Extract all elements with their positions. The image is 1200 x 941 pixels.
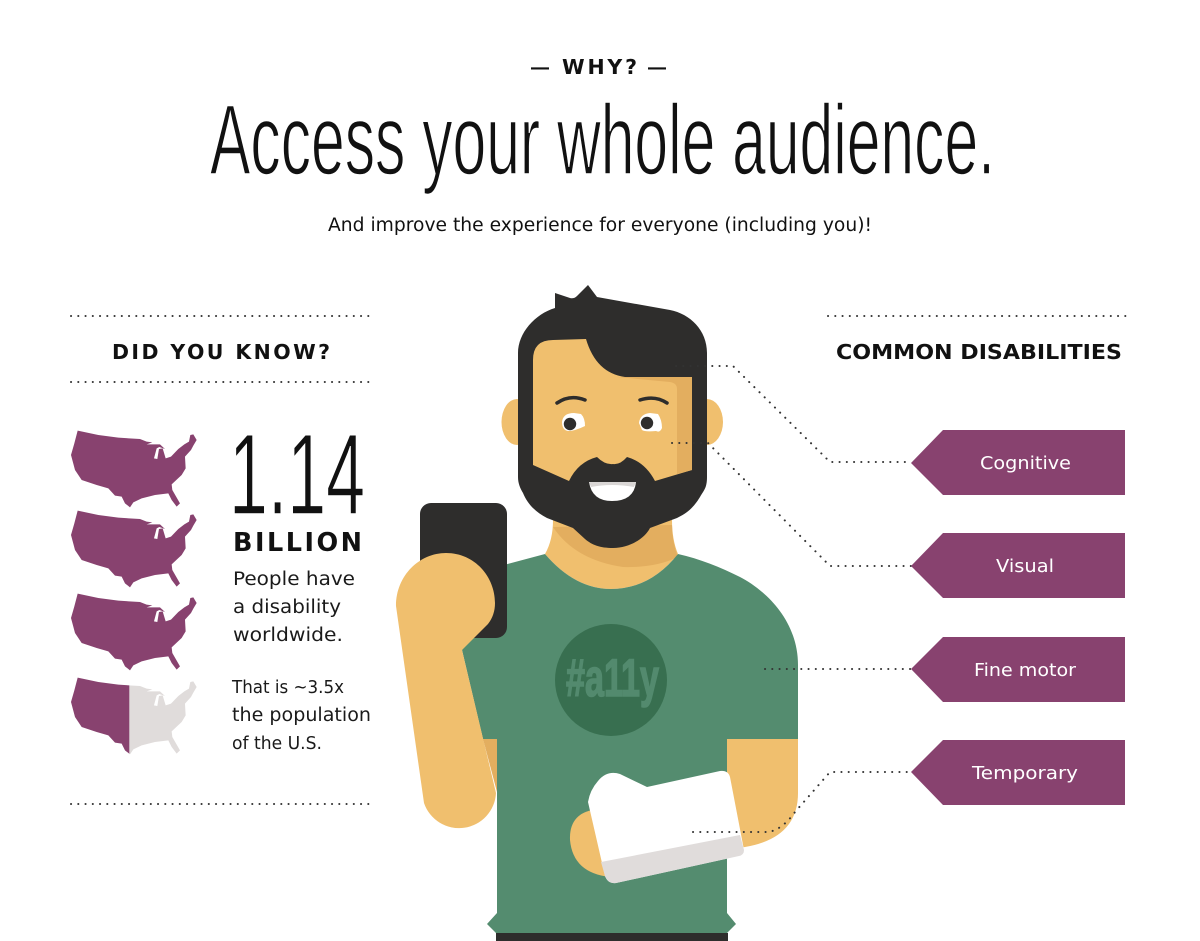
- shirt badge: [555, 624, 667, 736]
- stat unit: BILLION: [233, 528, 362, 558]
- connector: temporary: [693, 772, 911, 832]
- left ear: [502, 399, 532, 445]
- tag: fine motor: Fine motor: [974, 661, 1077, 681]
- connector: cognitive: [676, 366, 911, 462]
- hand: [570, 810, 610, 877]
- face shadow: [617, 377, 692, 474]
- right eye: [639, 413, 662, 432]
- icon: US map 1: [71, 431, 197, 507]
- stat number: 1.14: [229, 411, 365, 539]
- trousers: [496, 933, 728, 941]
- heading: did you know: DID YOU KNOW?: [112, 340, 330, 364]
- phone: [420, 503, 507, 638]
- face: [533, 339, 692, 481]
- population comparison: That is ~3.5x: [231, 678, 344, 698]
- connector: fine motor: [765, 668, 911, 670]
- cast shadow: [601, 835, 744, 883]
- tag: temporary: [911, 740, 1125, 805]
- neck shadow: [553, 525, 678, 567]
- right eyebrow: [640, 398, 667, 403]
- population comparison: [231, 678, 371, 754]
- eyebrow: why: —: [531, 56, 549, 79]
- tag: visual: Visual: [996, 557, 1054, 577]
- illustration: person: [396, 285, 798, 941]
- right ear: [691, 399, 723, 445]
- left eye: [562, 413, 585, 431]
- heading: common disabilities: COMMON DISABILITIES: [836, 340, 1122, 364]
- neck: [545, 520, 678, 589]
- subtitle: And improve the experience for everyone (including you)!: [328, 215, 872, 236]
- eyebrow: why: WHY?: [562, 55, 637, 79]
- tag: cognitive: [911, 430, 1125, 495]
- panel: common disabilities: [672, 316, 1126, 832]
- stat description: People have: [233, 569, 355, 590]
- tag: cognitive: Cognitive: [980, 454, 1071, 474]
- stat description: [233, 569, 355, 646]
- population comparison: the population: [232, 705, 371, 726]
- connector: visual: [672, 443, 911, 566]
- tag: temporary: Temporary: [971, 764, 1078, 784]
- left arm shadow: [483, 739, 497, 792]
- icon: US map half filled: [71, 678, 197, 754]
- eyebrow: why: —: [648, 56, 666, 79]
- stat description: a disability: [233, 597, 341, 618]
- badge text: #a11y: [566, 649, 659, 708]
- shirt: [462, 554, 798, 933]
- stat description: worldwide.: [233, 625, 343, 646]
- left arm: [396, 553, 496, 828]
- eyebrow: why: [531, 55, 666, 79]
- population comparison: of the U.S.: [232, 734, 322, 754]
- tag: fine motor: [911, 637, 1125, 702]
- left eyebrow: [557, 398, 585, 403]
- icon: US map 3: [71, 594, 197, 670]
- icon: US map 2: [71, 511, 197, 587]
- mouth: [589, 482, 636, 501]
- right arm: [727, 739, 798, 850]
- panel: did you know: [71, 316, 371, 804]
- cast: [588, 771, 744, 883]
- tag: visual: [911, 533, 1125, 598]
- hair and beard: [518, 285, 707, 548]
